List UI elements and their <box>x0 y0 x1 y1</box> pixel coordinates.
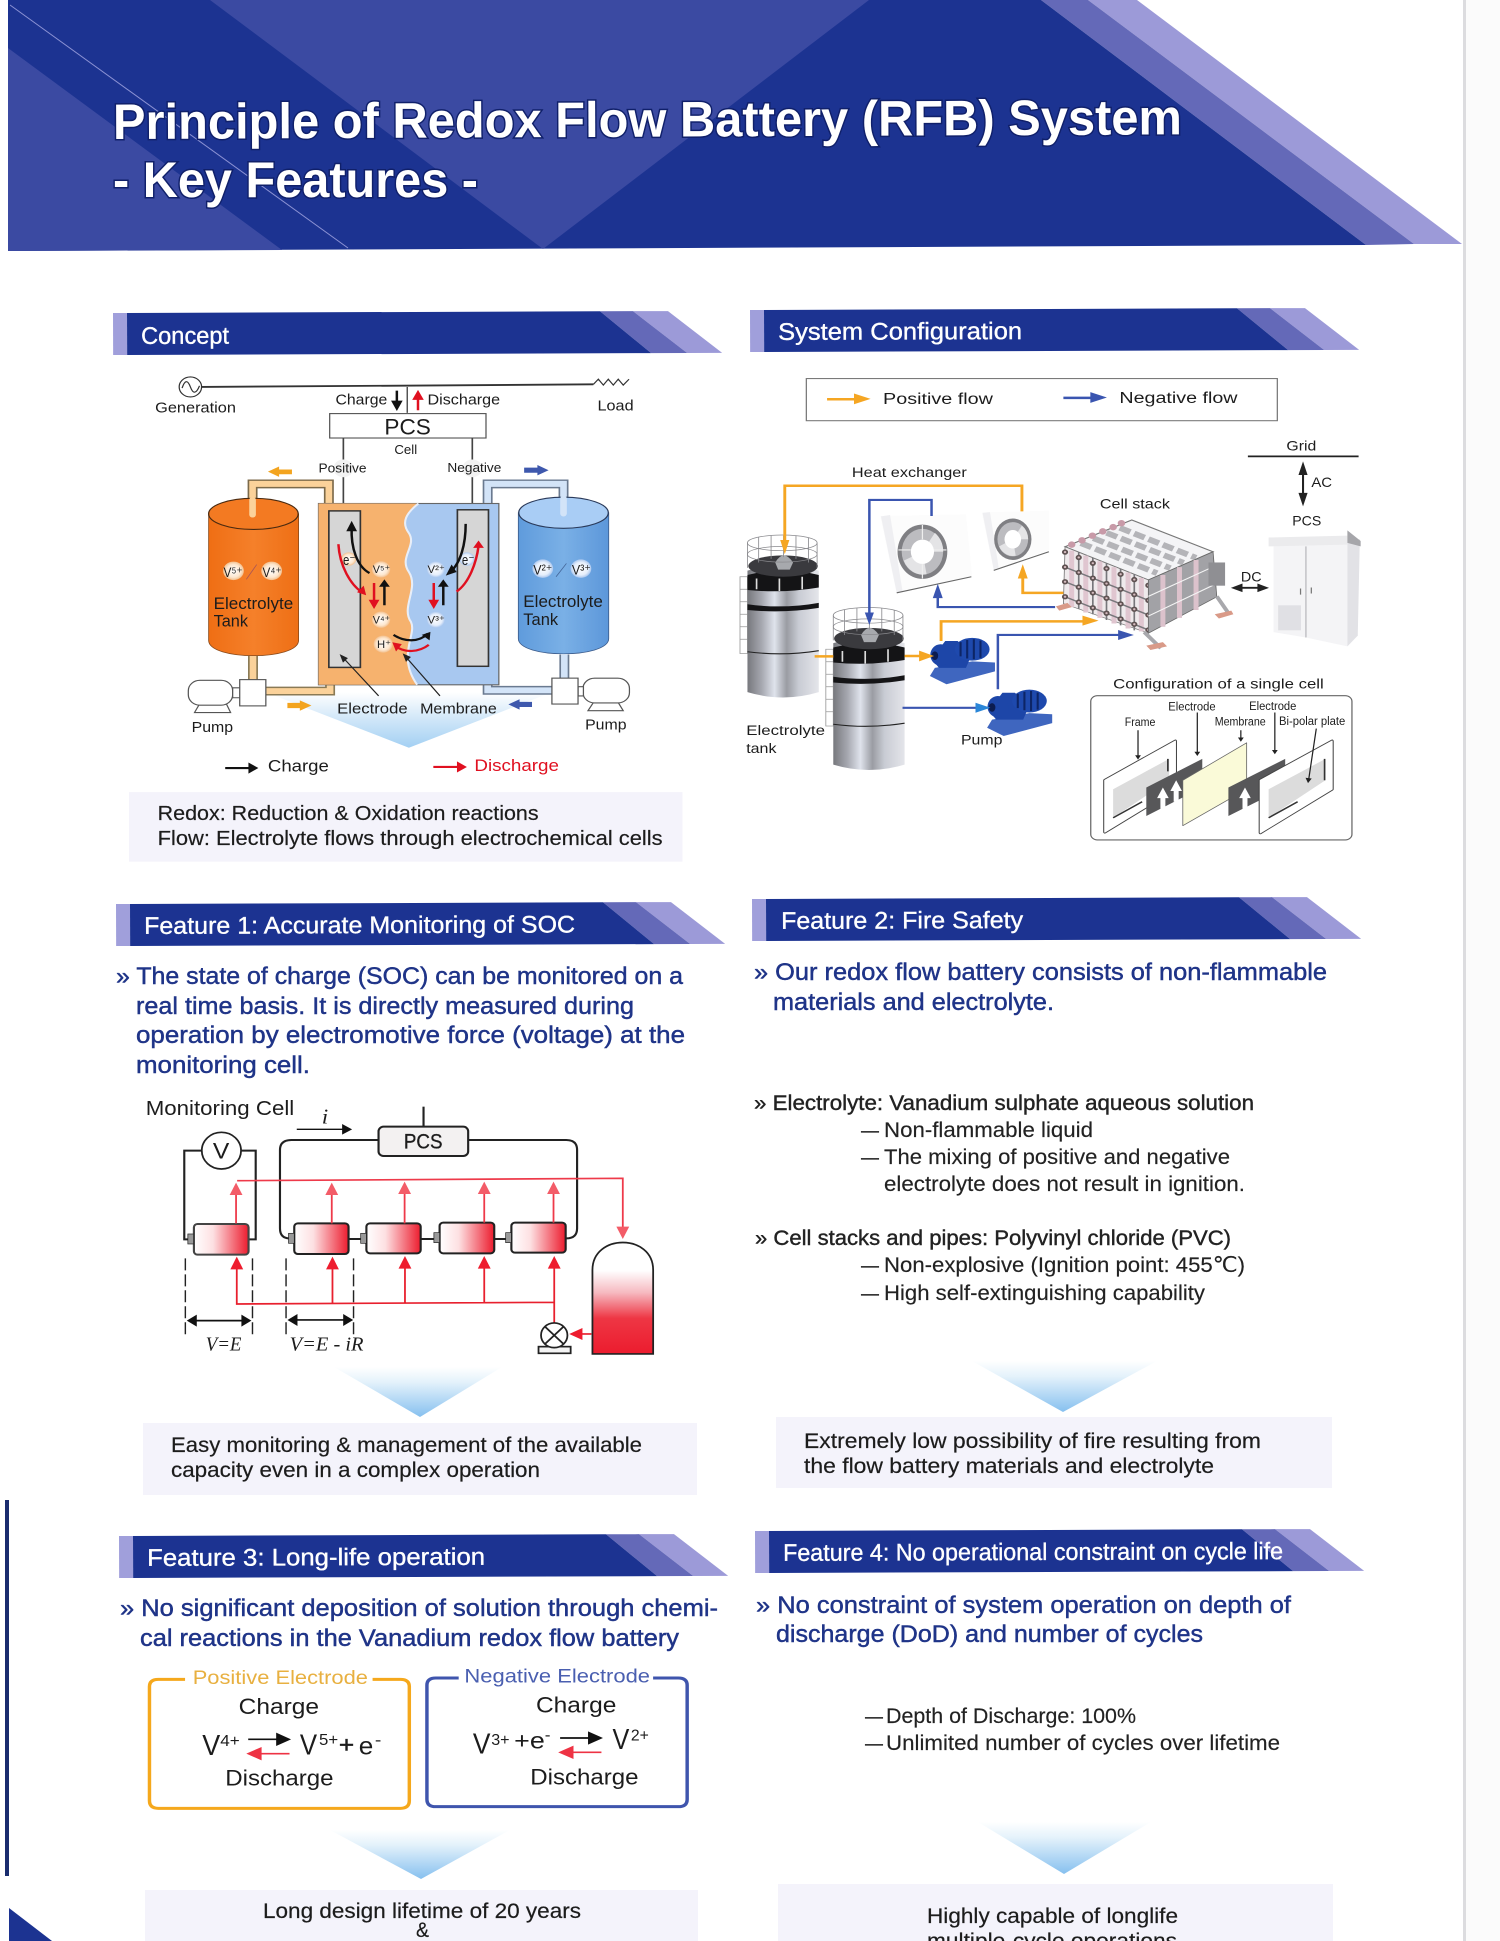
ions and reaction arrows: V³⁺ <box>428 614 445 626</box>
positive electrode box: e <box>359 1731 373 1760</box>
positive electrode box: - <box>375 1732 381 1749</box>
negative electrode box: Discharge <box>530 1766 639 1790</box>
feature 3 text <box>120 1595 718 1652</box>
single cell configuration: Configuration of a single cell <box>1113 677 1324 692</box>
panel: redox definition: Flow: Electrolyte flows through electrochemical cells <box>158 828 663 850</box>
pumps <box>930 638 1052 736</box>
feature 4 list: — <box>865 1705 883 1728</box>
heading: Feature 4 <box>755 1529 1364 1573</box>
feature 2 result panel: Extremely low possibility of fire resulting from <box>804 1430 1261 1453</box>
DC link: DC <box>1241 569 1262 585</box>
positive flow lines <box>785 486 1086 656</box>
feature 4 text <box>756 1592 1291 1648</box>
feature 3 result panel: Long design lifetime of 20 years <box>263 1900 581 1923</box>
title <box>113 89 1182 208</box>
heat exchanger units: Heat exchanger <box>852 465 967 481</box>
labels: bottom: Pump <box>585 717 627 733</box>
ions and reaction arrows: e⁻ <box>462 553 474 569</box>
grid and AC link: PCS <box>1292 514 1321 529</box>
heading: Feature 3: Feature 3: Long-life operation <box>147 1544 485 1572</box>
labels: tank and pump <box>746 723 1002 756</box>
positive electrode box: 4+ <box>220 1733 240 1750</box>
voltage brackets: V=E <box>206 1334 242 1355</box>
feature 2 result panel <box>776 1417 1332 1488</box>
negative electrode box: Charge <box>536 1694 616 1718</box>
heading: Feature 4: Feature 4: No operational constraint on cycle life <box>783 1538 1283 1567</box>
heading: Concept: Concept <box>141 323 229 350</box>
feature 4 list: Depth of Discharge: 100% <box>886 1705 1136 1728</box>
labels: tank and pump: Electrolyte <box>746 723 825 739</box>
feature 3 result arrow <box>330 1830 510 1879</box>
feature 2 electrolyte list: The mixing of positive and negative <box>884 1146 1230 1169</box>
positive electrode box: V <box>300 1728 317 1761</box>
labels: tank and pump: Pump <box>961 733 1002 748</box>
feature 2 materials list: » Cell stacks and pipes: Polyvinyl chloride (PVC) <box>755 1227 1231 1250</box>
cell terminals <box>318 438 502 512</box>
feature 2 electrolyte list <box>754 1092 1254 1196</box>
upper red arrowheads <box>230 1182 629 1239</box>
heading: Feature 1 <box>116 902 725 946</box>
labels: Monitoring Cell <box>146 1098 294 1120</box>
feature 2 result arrow <box>972 1361 1157 1412</box>
feature 2 materials list <box>755 1227 1245 1305</box>
feature 1 monitoring cell diagram <box>146 1098 653 1355</box>
feature 2 text <box>754 959 1327 1016</box>
positive electrode box: Discharge <box>225 1767 334 1791</box>
title: - Key Features - <box>113 152 478 208</box>
feature 2 text: materials and electrolyte. <box>773 989 1054 1016</box>
right page strip <box>1464 0 1500 1941</box>
cell connectors <box>188 1233 511 1244</box>
voltage brackets: V=E - iR <box>290 1334 364 1355</box>
heading: Feature 2: Feature 2: Fire Safety <box>781 907 1023 935</box>
feature 1 text <box>116 963 685 1079</box>
right electrolyte tank <box>518 497 609 654</box>
feature 1 text: monitoring cell. <box>136 1052 310 1079</box>
feature 1 text: » The state of charge (SOC) can be monitored on a <box>116 963 684 990</box>
flow arrows <box>268 465 549 711</box>
feature 4 result arrow <box>978 1822 1151 1874</box>
labels: bottom: Pump <box>192 720 233 736</box>
feature 1 result panel <box>143 1423 697 1495</box>
feature 2 materials list: Non-explosive (Ignition point: 455℃) <box>884 1254 1245 1277</box>
feature 4 list <box>865 1705 1280 1755</box>
labels: top: Load <box>598 398 634 414</box>
right electrolyte tank: Electrolyte <box>523 592 603 611</box>
grid and AC link: Grid <box>1286 438 1316 454</box>
feature 4 result panel: Highly capable of longlife <box>927 1905 1178 1928</box>
heading: Feature 1: Feature 1: Accurate Monitoring of SOC <box>144 911 575 940</box>
feature 1 result panel: capacity even in a complex operation <box>171 1459 540 1482</box>
left electrolyte tank: V⁵⁺ <box>224 565 243 581</box>
negative flow arrowheads <box>865 584 1134 640</box>
right electrolyte tank: Tank <box>523 610 558 629</box>
heat exchanger units <box>852 465 1049 594</box>
feature 3 text: cal reactions in the Vanadium redox flow battery <box>140 1625 679 1652</box>
labels: bottom: Electrode <box>337 701 408 717</box>
electrolyte tanks <box>740 535 905 770</box>
left electrolyte tank <box>209 498 299 656</box>
feature 2 electrolyte list: — <box>861 1119 879 1142</box>
ions and reaction arrows: V²⁺ <box>428 564 445 576</box>
feature 4 list: — <box>865 1732 883 1755</box>
right electrolyte tank: V³⁺ <box>572 562 591 578</box>
heading: Concept <box>113 311 722 355</box>
cell body <box>318 504 499 685</box>
cell stack: Cell stack <box>1100 497 1170 512</box>
cell stack <box>1056 497 1233 650</box>
feature 2 materials list: — <box>861 1254 879 1277</box>
feature 2 materials list: — <box>861 1282 879 1305</box>
ions and reaction arrows: H⁺ <box>377 639 391 651</box>
PCS cabinet <box>1269 530 1361 646</box>
labels: bottom: Membrane <box>420 701 497 717</box>
feature 2 text: » Our redox flow battery consists of non-flammable <box>754 959 1327 986</box>
legend: charge and discharge: Charge <box>268 757 329 776</box>
cell terminals: Positive <box>318 461 367 475</box>
labels: tank and pump: tank <box>746 741 777 756</box>
charge and discharge direction arrows <box>391 390 424 411</box>
labels <box>146 1098 352 1135</box>
feature 4 text: discharge (DoD) and number of cycles <box>776 1621 1203 1648</box>
positive electrode box: Positive Electrode <box>193 1667 368 1689</box>
single cell configuration: Electrode <box>1168 700 1216 713</box>
title: Principle of Redox Flow Battery (RFB) System <box>113 89 1182 150</box>
header banner <box>8 0 1462 251</box>
pipes <box>253 484 564 691</box>
single cell configuration <box>1091 677 1352 840</box>
voltage brackets <box>185 1258 364 1355</box>
positive electrode box <box>149 1667 409 1808</box>
left electrolyte tank: V⁴⁺ <box>263 565 282 581</box>
flow legend: Negative flow <box>1119 389 1238 407</box>
positive electrode box: Charge <box>239 1695 319 1720</box>
feature 2 electrolyte list: » Electrolyte: Vanadium sulphate aqueous solution <box>754 1092 1254 1115</box>
feature 2 electrolyte list: Non-flammable liquid <box>884 1119 1093 1142</box>
positive electrode box: V <box>202 1729 221 1761</box>
negative electrode box <box>427 1666 687 1807</box>
negative electrode box: Negative Electrode <box>464 1666 650 1687</box>
negative electrode box: V <box>473 1728 491 1760</box>
right electrolyte tank: V²⁺ <box>533 562 552 578</box>
PCS box <box>379 1127 468 1156</box>
voltmeter <box>202 1132 241 1169</box>
upper red flow lines <box>236 1178 623 1228</box>
cell terminals: Negative <box>447 461 502 475</box>
negative electrode box: - <box>545 1727 551 1744</box>
PCS box <box>330 414 486 439</box>
concept diagram <box>129 377 683 862</box>
feature 4 result panel <box>778 1884 1333 1941</box>
positive electrode box: + <box>339 1732 354 1758</box>
negative electrode box: 2+ <box>631 1728 649 1744</box>
cell terminals: Cell <box>394 443 417 457</box>
single cell configuration: Electrode <box>1249 699 1296 713</box>
ions and reaction arrows <box>338 521 484 696</box>
labels: i <box>322 1104 328 1128</box>
feature 3 text: » No significant deposition of solution through chemi- <box>120 1595 718 1622</box>
labels: bottom <box>192 701 627 736</box>
panel: redox definition: Redox: Reduction & Oxidation reactions <box>158 803 539 825</box>
grid and AC link: AC <box>1311 475 1332 491</box>
left edge dark binding line <box>5 1500 9 1876</box>
electrolyte tank <box>592 1242 653 1354</box>
delivery triangle <box>266 692 552 748</box>
feature 3 result panel <box>145 1890 698 1941</box>
pump <box>539 1323 591 1353</box>
grid line with generation and load <box>179 377 629 413</box>
feature 4 list: Unlimited number of cycles over lifetime <box>886 1732 1280 1755</box>
voltmeter: V <box>213 1138 230 1163</box>
feature 2 materials list: High self-extinguishing capability <box>884 1282 1206 1305</box>
heading: System Configuration: System Configuration <box>778 318 1022 346</box>
left electrolyte tank: Tank <box>214 611 248 630</box>
legend: charge and discharge: Discharge <box>474 756 559 775</box>
flow legend <box>806 379 1277 421</box>
lower red flow lines <box>237 1267 554 1323</box>
positive electrode box: 5+ <box>319 1732 338 1749</box>
PCS box: PCS <box>384 415 431 439</box>
feature 2 electrolyte list: electrolyte does not result in ignition. <box>884 1173 1245 1196</box>
cell row <box>194 1223 566 1255</box>
feature 1 text: real time basis. It is directly measured during <box>136 993 634 1020</box>
feature 1 result arrow <box>334 1367 502 1417</box>
feature 3 reaction boxes <box>149 1666 687 1808</box>
ions and reaction arrows: V⁴⁺ <box>373 614 390 626</box>
circuit wiring <box>184 1107 577 1239</box>
single cell configuration: Frame <box>1125 715 1155 729</box>
system configuration diagram <box>740 379 1361 840</box>
heading: Feature 2 <box>752 897 1361 941</box>
positive flow arrowheads <box>780 540 1099 661</box>
negative electrode box: +e <box>514 1728 545 1754</box>
legend: charge and discharge <box>225 756 559 776</box>
grid and AC link <box>1248 438 1359 529</box>
feature 4 text: » No constraint of system operation on depth of <box>756 1592 1291 1619</box>
PCS box: PCS <box>404 1129 442 1153</box>
single cell configuration: Membrane <box>1215 715 1266 728</box>
negative electrode box: V <box>613 1723 630 1755</box>
flow legend: Positive flow <box>883 390 994 408</box>
labels: top: Discharge <box>428 392 500 408</box>
left pump <box>188 680 266 713</box>
negative electrode box: 3+ <box>491 1732 510 1749</box>
labels: top: Generation <box>155 400 236 416</box>
negative flow lines <box>869 500 1121 708</box>
ions and reaction arrows: V⁵⁺ <box>373 564 390 576</box>
bottom-left corner triangle <box>9 1908 52 1941</box>
right pump <box>552 678 629 711</box>
heading: Feature 3 <box>119 1534 728 1578</box>
labels: top <box>155 392 634 416</box>
left electrolyte tank: Electrolyte <box>214 594 293 613</box>
single cell configuration: Bi-polar plate <box>1279 714 1345 728</box>
panel: redox definition <box>129 792 683 862</box>
feature 1 text: operation by electromotive force (voltage) at the <box>136 1022 685 1049</box>
ions and reaction arrows: e⁻ <box>343 553 355 569</box>
labels: top: Charge <box>335 392 388 408</box>
DC link <box>1231 569 1269 592</box>
heading: System Configuration <box>750 308 1359 352</box>
feature 2 electrolyte list: — <box>861 1146 879 1169</box>
lower red arrowheads <box>230 1256 561 1269</box>
feature 1 result panel: Easy monitoring & management of the available <box>171 1434 642 1457</box>
feature 2 result panel: the flow battery materials and electrolyte <box>804 1455 1214 1478</box>
